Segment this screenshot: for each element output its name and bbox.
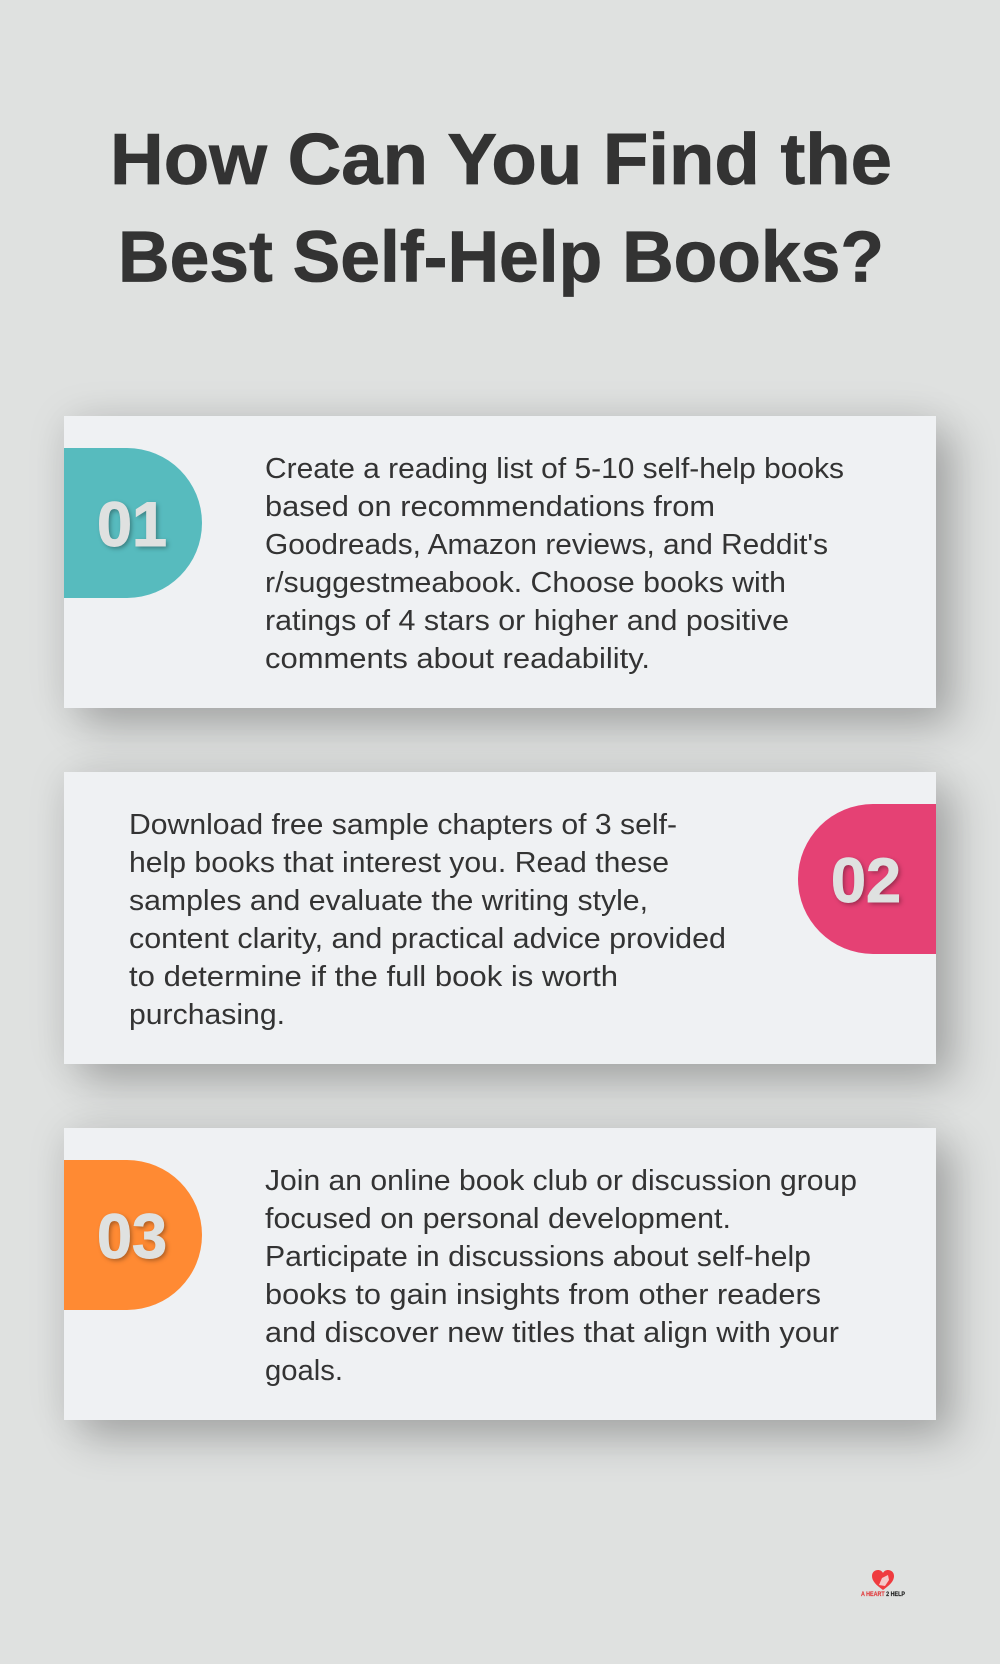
text block: step 1: comments about readability. bbox=[265, 643, 650, 675]
text block: step 1: based on recommendations from bbox=[265, 491, 715, 523]
text block: step 3: focused on personal development. bbox=[265, 1203, 731, 1235]
text block: step 1 bbox=[265, 453, 844, 675]
icon: heart bbox=[872, 1570, 894, 1590]
badge: 03 bbox=[64, 1160, 202, 1310]
title bbox=[110, 120, 892, 298]
badge: 01: 01 bbox=[97, 490, 167, 560]
title: How Can You Find the bbox=[110, 120, 892, 200]
text block: step 3 bbox=[265, 1165, 857, 1387]
panel: step 1 bbox=[64, 416, 936, 708]
text block: step 3: Participate in discussions about self-help bbox=[265, 1241, 811, 1273]
text block: step 2: Download free sample chapters of 3 self- bbox=[129, 809, 677, 841]
title: Best Self-Help Books? bbox=[118, 218, 884, 298]
text block: step 3: and discover new titles that align with your bbox=[265, 1317, 839, 1349]
badge: 03: 03 bbox=[97, 1202, 167, 1272]
badge: 02 bbox=[798, 804, 936, 954]
text block: step 1: r/suggestmeabook. Choose books with bbox=[265, 567, 786, 599]
text block: step 2: to determine if the full book is worth bbox=[129, 961, 618, 993]
logo text: A HEART 2 HELP bbox=[861, 1591, 905, 1598]
text block: step 3: goals. bbox=[265, 1355, 343, 1387]
text block: step 2: help books that interest you. Read these bbox=[129, 847, 669, 879]
panel: step 2 bbox=[64, 772, 936, 1064]
text block: step 1: ratings of 4 stars or higher and positive bbox=[265, 605, 789, 637]
badge: 01 bbox=[64, 448, 202, 598]
text block: step 1: Create a reading list of 5-10 self-help books bbox=[265, 453, 844, 485]
text block: step 3: books to gain insights from other readers bbox=[265, 1279, 821, 1311]
text block: step 2: content clarity, and practical advice provided bbox=[129, 923, 726, 955]
badge: 02: 02 bbox=[831, 846, 901, 916]
text block: step 2: samples and evaluate the writing style, bbox=[129, 885, 648, 917]
text block: step 3: Join an online book club or discussion group bbox=[265, 1165, 857, 1197]
text block: step 2: purchasing. bbox=[129, 999, 285, 1031]
panel: step 3 bbox=[64, 1128, 936, 1420]
text block: step 1: Goodreads, Amazon reviews, and Reddit's bbox=[265, 529, 828, 561]
text block: step 2 bbox=[129, 809, 726, 1031]
logo: A Heart 2 Help bbox=[861, 1570, 905, 1598]
